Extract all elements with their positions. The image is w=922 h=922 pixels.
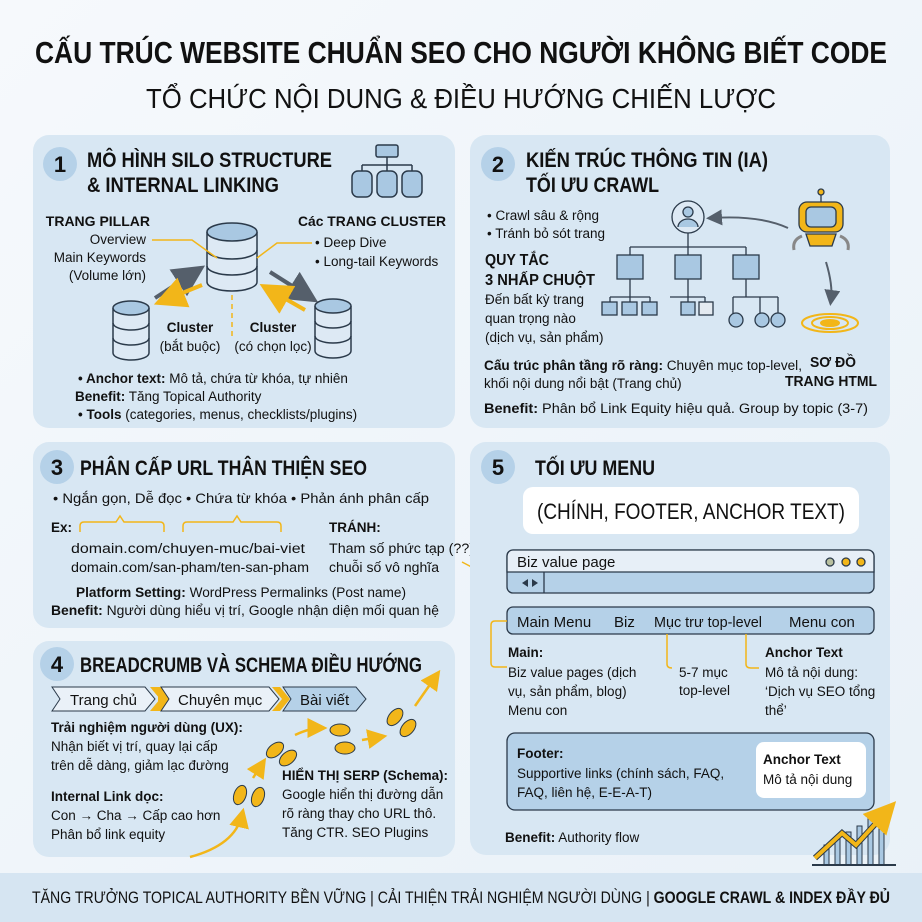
text: url examples: TRÁNH: [329,520,381,535]
number badge 4: 4 [51,652,64,677]
text: menu notes [508,645,875,718]
text: 3 click rule: QUY TẮC [485,250,549,269]
text: url examples: Benefit: Người dùng hiểu vị trí, Google nhận diện mối quan hệ [51,603,439,618]
text: crawl bullets: • Tránh bỏ sót trang [487,226,605,241]
icon: footsteps path [231,705,419,808]
text: anchor / benefit / tools: Benefit: Tăng Topical Authority [75,389,262,404]
breadcrumb bar: Chuyên mục [178,692,263,709]
text: menu notes: Anchor Text [765,645,843,660]
menu bar: Menu con [789,614,855,631]
icon: robot [794,189,848,250]
text: 3 click rule: 3 NHẤP CHUỘT [485,270,595,289]
text: menu notes: Menu con [508,703,567,718]
icon: growth chart [812,808,896,865]
text: cluster pages: • Long-tail Keywords [315,254,439,269]
panel: silo structure [33,135,455,428]
footer box: Anchor Text [763,752,841,767]
footer banner [0,873,922,922]
breadcrumb bar [52,687,366,711]
title [35,34,887,114]
panel: menu optimization [470,442,890,855]
number badge 3: 3 [51,455,63,480]
text: menu notes: top-level [679,683,730,698]
menu bar [507,607,874,634]
number badge 3 [40,450,74,484]
text: trang pillar [46,213,150,283]
text: anchor / benefit / tools: • Tools (categories, menus, checklists/plugins) [78,407,357,422]
text: 3 click rule [485,250,604,345]
number badge 1: 1 [54,152,66,177]
text: crawl bullets: • Crawl sâu & rộng [487,208,599,223]
text: menu notes: Main: [508,645,543,660]
panel: silo structure: & INTERNAL LINKING [87,174,279,197]
text: menu notes: 5-7 mục [679,665,728,680]
text: 3 click rule: quan trọng nào [485,311,576,326]
panel: URL hierarchy [33,442,474,628]
text: UX [51,720,243,842]
footer banner: TĂNG TRƯỞNG TOPICAL AUTHORITY BỀN VỮNG | CẢI THIỆN TRẢI NGHIỆM NGƯỜI DÙNG | GOOGLE CRAWL & INDEX ĐẦY ĐỦ [32,888,890,907]
text: 3 click rule: Đến bất kỳ trang [485,292,584,307]
arrow: url to browser [462,562,492,580]
text: anchor / benefit / tools: • Anchor text: Mô tả, chứa từ khóa, tự nhiên [78,371,348,386]
text: url examples: Platform Setting: WordPress Permalinks (Post name) [76,585,406,600]
text: url examples: domain.com/san-pham/ten-san-pham [71,560,309,575]
menu bar: Main Menu [517,614,591,631]
text: benefit: Benefit: Authority flow [505,830,640,845]
arrows: robot [712,217,831,300]
text: url examples: Ex: [51,520,72,535]
text: cluster labels [160,320,312,354]
heading 5: TỐI ƯU MENU [535,456,655,480]
menu bar: Biz [614,614,635,631]
text: menu notes: Biz value pages (dịch [508,665,636,680]
panel: information architecture: TỐI ƯU CRAWL [526,173,659,197]
panel: breadcrumb [33,641,455,857]
text: cluster pages [298,213,446,269]
arrows [155,272,308,310]
text: cluster pages: • Deep Dive [315,235,387,250]
text: hierarchy / sitemap: khối nội dung nổi bật (Trang chủ) [484,376,682,391]
icon: silo hierarchy [352,145,422,197]
text: 3 click rule: (dịch vụ, sản phẩm) [485,330,604,345]
heading 1: MÔ HÌNH SILO STRUCTURE [87,148,332,172]
heading 4: BREADCRUMB VÀ SCHEMA ĐIỀU HƯỚNG [80,653,422,677]
text: UX: Nhận biết vị trí, quay lại cấp [51,739,218,754]
text: SERP: Google hiển thị đường dẫn [282,787,443,802]
text: SERP: rõ ràng thay cho URL thô. [282,806,436,821]
icon: pillar database [207,223,257,291]
footer box: FAQ, liên hệ, E-E-A-T) [517,785,652,800]
number badge 4 [40,647,74,681]
breadcrumb bar: Bài viết [300,692,350,709]
heading 3: PHÂN CẤP URL THÂN THIỆN SEO [80,456,367,480]
connectors [152,240,312,340]
text: cluster labels: Cluster [250,320,297,335]
number badge 2 [481,147,515,181]
text: cluster pages: Các TRANG CLUSTER [298,213,446,229]
text: menu notes: ‘Dịch vụ SEO tổng [765,684,875,699]
braces [80,516,281,532]
text: cluster labels: (bắt buộc) [160,339,220,354]
text: hierarchy / sitemap: TRANG HTML [785,373,877,390]
text: hierarchy / sitemap: SƠ ĐỒ [810,353,856,371]
text: hierarchy / sitemap [484,353,877,416]
footer box: Mô tả nội dung [763,772,852,787]
text: UX: Trải nghiệm người dùng (UX): [51,720,243,735]
subheading box: (CHÍNH, FOOTER, ANCHOR TEXT) [537,499,845,524]
text: UX: Internal Link dọc: [51,789,164,804]
text: trang pillar: TRANG PILLAR [46,213,150,229]
footer box: Footer: [517,746,564,761]
menu bar: Mục trư top-level [654,614,762,631]
text: UX: trên dễ dàng, giảm lạc đường [51,758,229,773]
text: url examples [51,520,474,618]
text: hierarchy / sitemap: Benefit: Phân bổ Link Equity hiệu quả. Group by topic (3-7) [484,401,868,416]
number badge 2: 2 [492,152,504,177]
footer box [507,733,874,810]
text: trang pillar: Overview [90,232,146,247]
text: UX: Phân bổ link equity [51,827,165,842]
text: hierarchy / sitemap: Cấu trúc phân tầng rõ ràng: Chuyên mục top-level, [484,358,802,373]
text: cluster labels: Cluster [167,320,214,335]
connectors [491,621,759,668]
footer box: Supportive links (chính sách, FAQ, [517,766,724,781]
text: url examples: Tham số phức tạp (??) [329,541,474,556]
text: url bullets: • Ngắn gọn, Dễ đọc • Chứa từ khóa • Phản ánh phân cấp [53,490,429,506]
breadcrumb bar: Trang chủ [70,692,137,709]
icon: target [802,314,858,332]
icon: cluster databases [113,299,351,360]
browser window: Biz value page [517,554,615,571]
number badge 5: 5 [492,455,504,480]
text: menu notes: thể’ [765,703,787,718]
subheading box [523,487,859,534]
text: url examples: domain.com/chuyen-muc/bai-viet [71,541,305,556]
text: menu notes: Mô tả nội dung: [765,665,858,680]
number badge 5 [481,450,515,484]
arrows: footsteps [190,676,436,857]
chart: site tree [602,201,785,327]
text: trang pillar: (Volume lớn) [69,268,146,283]
text: anchor / benefit / tools [75,371,357,422]
text: trang pillar: Main Keywords [54,250,146,265]
panel: information architecture [470,135,890,428]
text: menu notes: vụ, sản phẩm, blog) [508,684,627,699]
heading 2: KIẾN TRÚC THÔNG TIN (IA) [526,148,768,172]
text: SERP: HIỂN THỊ SERP (Schema): [282,768,448,783]
text: crawl bullets [487,208,605,241]
text: SERP [282,768,448,840]
text: cluster labels: (có chọn lọc) [234,339,312,354]
text: SERP: Tăng CTR. SEO Plugins [282,825,429,840]
title: TỔ CHỨC NỘI DUNG & ĐIỀU HƯỚNG CHIẾN LƯỢC [146,83,776,114]
text: url examples: chuỗi số vô nghĩa [329,560,440,575]
text: UX: Con → Cha → Cấp cao hơn [51,808,220,823]
browser window [507,550,874,593]
number badge 1 [43,147,77,181]
